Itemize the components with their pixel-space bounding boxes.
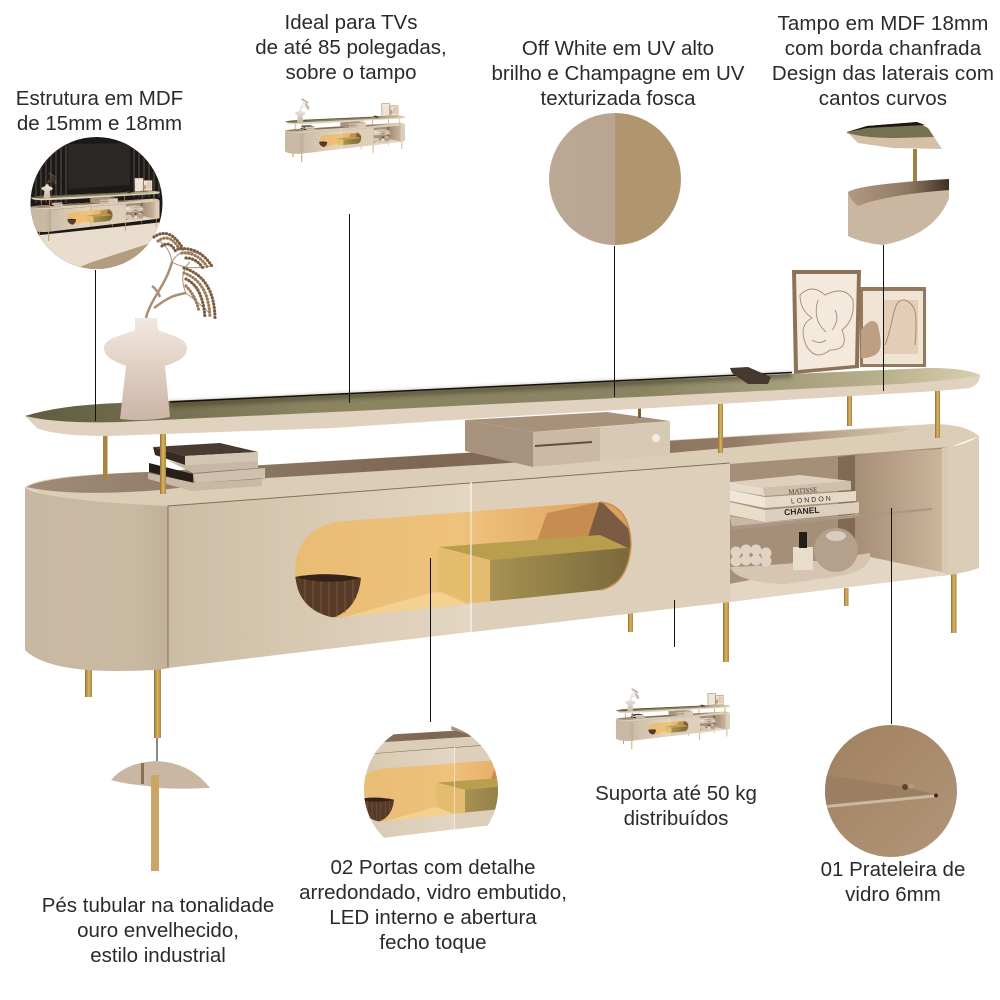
text: top panel: Design das laterais com <box>772 62 994 85</box>
text: doors: LED interno e abertura <box>329 906 537 929</box>
gold box <box>439 535 628 560</box>
text: finish <box>492 37 744 110</box>
interior floor <box>335 592 480 625</box>
text: top panel: cantos curvos <box>819 87 947 110</box>
text: tv size: de até 85 polegadas, <box>255 36 447 59</box>
text: tv size <box>255 11 447 84</box>
text: glass shelf: 01 Prateleira de <box>821 858 965 881</box>
icon: door detail circle <box>209 610 734 888</box>
text: load: Suporta até 50 kg <box>595 782 757 805</box>
icon: mini furniture load <box>616 689 730 749</box>
compartment floor <box>729 557 948 602</box>
text: top panel: Tampo em MDF 18mm <box>777 12 988 35</box>
text: glass shelf: vidro 6mm <box>845 883 941 906</box>
text: load: distribuídos <box>624 807 728 830</box>
text: load <box>595 782 757 830</box>
back legs <box>85 588 848 697</box>
text: top panel <box>772 12 994 110</box>
text: doors: fecho toque <box>379 931 487 954</box>
body top surface <box>25 424 979 506</box>
top shelf glass <box>25 368 980 422</box>
picture frames <box>792 270 926 374</box>
text: top panel: com borda chanfrada <box>785 37 981 60</box>
console <box>465 412 670 467</box>
icon: chamfered edge detail <box>847 122 949 245</box>
glass shelf <box>732 508 932 530</box>
vase with dried flowers <box>104 233 215 420</box>
gold legs <box>154 572 956 738</box>
text: tv size: Ideal para TVs <box>285 11 417 34</box>
bowl <box>295 574 361 617</box>
text: structure: Estrutura em MDF <box>16 87 183 110</box>
tray decor <box>730 528 870 584</box>
furniture illustration <box>25 233 980 738</box>
text: structure: de 15mm e 18mm <box>17 112 182 135</box>
icon: mini furniture TV size <box>285 99 405 162</box>
icon: structure detail circle <box>30 137 164 271</box>
books right: CHANEL <box>784 505 820 517</box>
books right: LONDON <box>791 496 833 505</box>
door panels <box>168 483 470 668</box>
icon: gold foot detail <box>111 761 210 871</box>
leader lines <box>96 214 892 761</box>
text: feet: Pés tubular na tonalidade <box>42 894 274 917</box>
text: glass shelf <box>821 858 965 906</box>
product illustration and callouts <box>25 98 980 871</box>
text: structure <box>16 87 183 135</box>
icon: glass shelf detail circle <box>825 725 957 857</box>
text: doors <box>299 856 567 954</box>
text: feet <box>42 894 274 967</box>
books in window <box>532 502 600 555</box>
shelf back shadow <box>170 372 792 404</box>
icon: colour swatch circle <box>549 113 681 245</box>
right open compartment <box>729 447 948 602</box>
right rounded end <box>948 436 979 575</box>
text: finish: Off White em UV alto <box>522 37 714 60</box>
books right: MATISSE <box>788 486 818 496</box>
remote <box>730 367 771 384</box>
text: feet: estilo industrial <box>90 944 226 967</box>
text: doors: 02 Portas com detalhe <box>330 856 536 879</box>
text: doors: arredondado, vidro embutido, <box>299 881 567 904</box>
books right <box>730 475 859 527</box>
books left <box>148 443 265 491</box>
door window with lit interior <box>290 495 640 625</box>
text: finish: texturizada fosca <box>540 87 695 110</box>
left rounded end <box>25 487 168 671</box>
body top shadow <box>27 427 909 493</box>
text: feet: ouro envelhecido, <box>77 919 239 942</box>
top shelf edge <box>25 368 980 436</box>
supports <box>103 390 940 494</box>
text: tv size: sobre o tampo <box>285 61 417 84</box>
text: finish: brilho e Champagne em UV <box>492 62 744 85</box>
